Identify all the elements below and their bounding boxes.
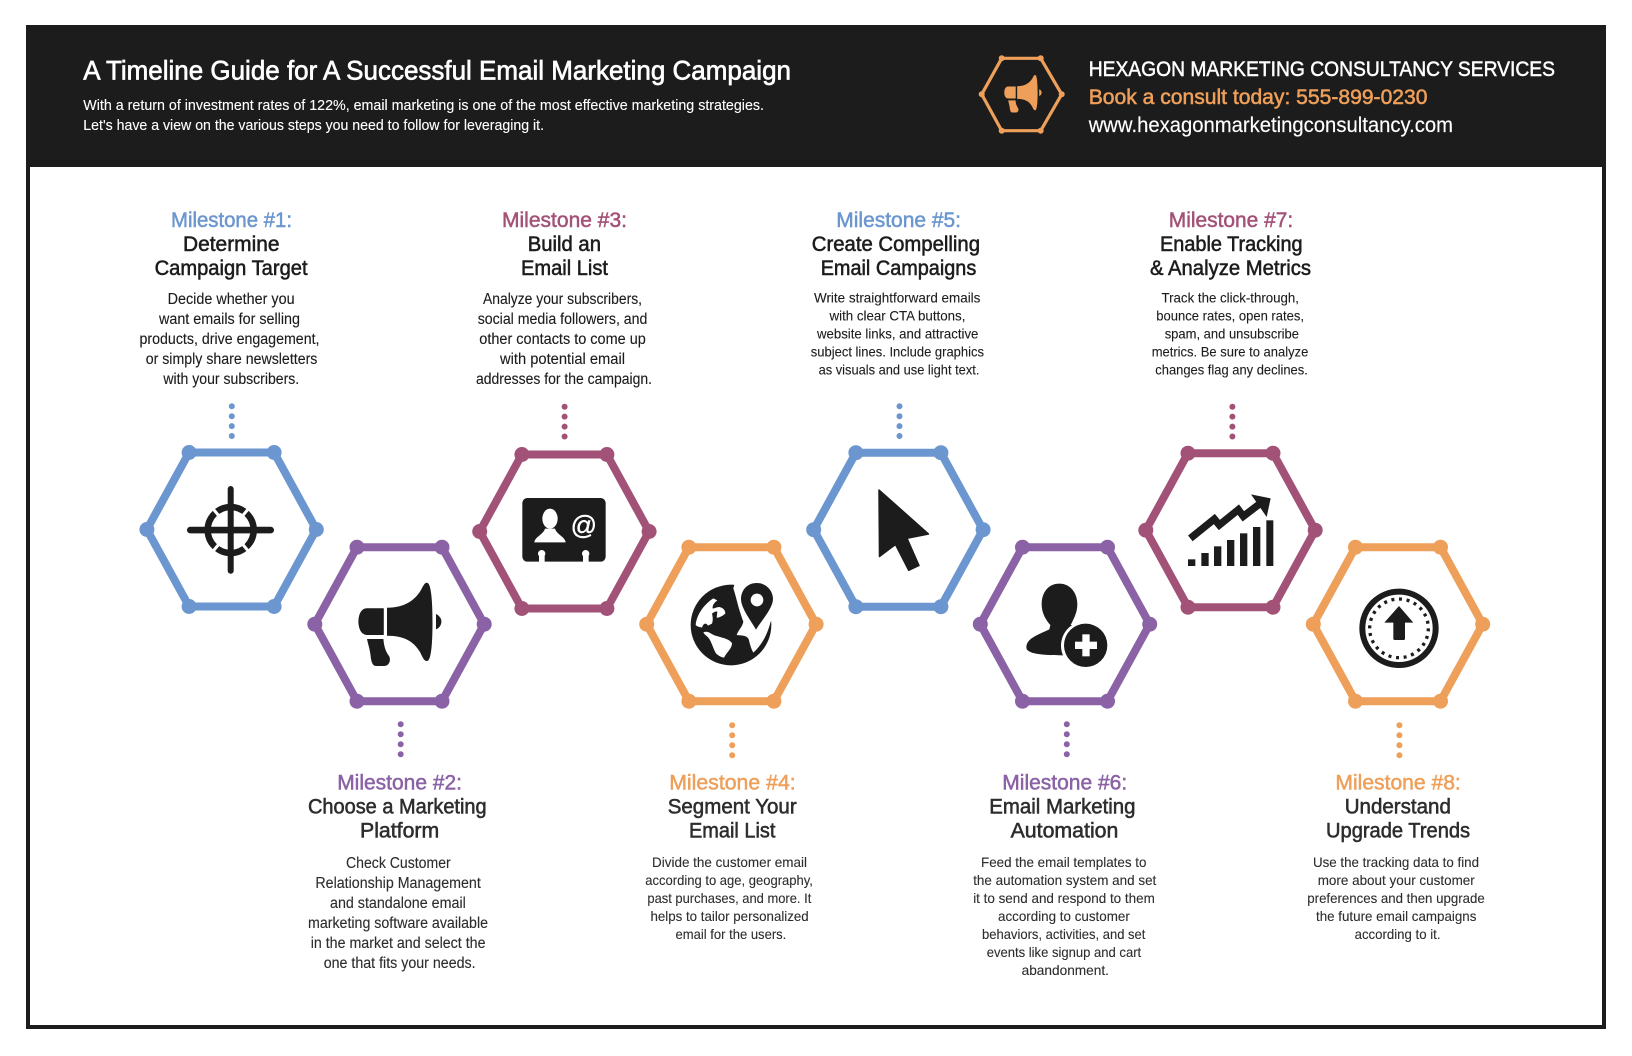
panel: milestone 3 (472, 208, 657, 616)
milestone 3 description: addresses for the campaign. (476, 371, 652, 388)
milestone 2 heading: Platform (360, 819, 439, 843)
title: A Timeline Guide for A Successful Email Marketing Campaign (83, 55, 791, 85)
icon: contact card with at sign: @ (571, 510, 597, 540)
milestone 2 description: marketing software available (308, 915, 488, 932)
subtitle text: With a return of investment rates of 122%, email marketing is one of the most effective marketing strategies. (83, 97, 764, 114)
icon: add user (1026, 584, 1110, 670)
milestone 2 description: one that fits your needs. (324, 955, 476, 972)
panel: milestone 8 (1306, 540, 1490, 942)
panel: milestone 6 (973, 540, 1157, 978)
milestone 1 description (140, 291, 320, 388)
milestone 3 description: with potential email (499, 351, 625, 368)
milestone 2 description: and standalone email (330, 895, 466, 912)
milestone 6 description: according to customer (998, 908, 1130, 924)
company contact block: HEXAGON MARKETING CONSULTANCY SERVICES (1089, 57, 1555, 81)
hexagon 5 (806, 445, 991, 614)
connector dots (896, 403, 902, 439)
milestone 7 description: Track the click-through, (1162, 290, 1299, 306)
milestone 3 heading: Build an (528, 232, 601, 256)
connector dots (1396, 722, 1402, 758)
milestone 7 description: bounce rates, open rates, (1156, 308, 1304, 324)
milestone 4 description: past purchases, and more. It (647, 890, 811, 906)
milestone 1 description: products, drive engagement, (140, 331, 320, 348)
milestone 4 description: email for the users. (676, 926, 786, 942)
milestone 6 heading: Email Marketing (989, 795, 1136, 819)
milestone 8 description: more about your customer (1318, 872, 1475, 888)
milestone 3 heading: Email List (521, 256, 608, 280)
milestone 4 heading: Email List (689, 819, 775, 843)
milestone 7 heading: Enable Tracking (1160, 232, 1303, 256)
panel: milestone 7 (1138, 208, 1323, 615)
hexagon 7 (1138, 446, 1323, 615)
milestone 7 description: changes flag any declines. (1155, 362, 1308, 378)
hexagon 3 (472, 447, 657, 616)
connector dots (1064, 721, 1070, 757)
milestone 5 label: Milestone #5: (836, 208, 961, 232)
panel: milestone 5 (806, 208, 991, 614)
milestone 8 description (1307, 854, 1485, 942)
connector dots (1229, 404, 1235, 440)
milestone 1 description: Decide whether you (168, 291, 295, 308)
hexagon 2 (307, 540, 492, 709)
hexagon 6 (973, 540, 1157, 709)
icon: logo hexagon with megaphone (979, 55, 1065, 134)
milestone 5 description: Write straightforward emails (814, 290, 980, 306)
milestone 7 description: metrics. Be sure to analyze (1152, 344, 1309, 360)
milestone 6 description: events like signup and cart (987, 944, 1141, 960)
milestone 8 heading (1326, 795, 1470, 843)
milestone 3 heading (521, 232, 608, 280)
company contact block: www.hexagonmarketingconsultancy.com (1088, 113, 1453, 137)
milestone 1 heading: Campaign Target (155, 256, 308, 280)
connector dots (229, 403, 235, 439)
milestone 4 heading: Segment Your (668, 795, 797, 819)
milestone 4 description: Divide the customer email (652, 854, 807, 870)
milestone 7 heading: & Analyze Metrics (1150, 256, 1311, 280)
milestone 3 label: Milestone #3: (502, 208, 627, 232)
icon: contact card with at sign (522, 498, 606, 562)
hexagon 4 (639, 540, 824, 709)
milestone 3 description: social media followers, and (478, 311, 647, 328)
connector dots (562, 404, 568, 440)
milestone 7 description: spam, and unsubscribe (1165, 326, 1299, 342)
milestone 2 heading (308, 795, 487, 843)
milestone 5 description: with clear CTA buttons, (829, 308, 965, 324)
milestone 1 heading (155, 232, 308, 280)
icon: megaphone (358, 583, 441, 666)
milestone 2 label: Milestone #2: (337, 771, 462, 795)
icon: cursor arrow (879, 490, 928, 570)
milestone 5 heading: Create Compelling (812, 232, 980, 256)
icon: globe with map pin (691, 580, 777, 665)
milestone 6 description: behaviors, activities, and set (982, 926, 1146, 942)
milestone 6 description: it to send and respond to them (973, 890, 1155, 906)
milestone 1 label: Milestone #1: (171, 208, 292, 232)
milestone 6 heading (989, 795, 1136, 843)
milestone 8 heading: Understand (1345, 795, 1451, 819)
milestone 5 description: website links, and attractive (816, 326, 979, 342)
milestone 2 description: Check Customer (346, 855, 451, 872)
milestone 8 description: the future email campaigns (1316, 908, 1476, 924)
milestone 8 description: Use the tracking data to find (1313, 854, 1479, 870)
connector dots (398, 721, 404, 757)
hexagon 8 (1306, 540, 1490, 709)
milestone 2 heading: Choose a Marketing (308, 795, 487, 819)
milestone 2 description: Relationship Management (315, 875, 481, 892)
panel: milestone 2 (307, 540, 492, 972)
milestone 7 description (1152, 290, 1309, 378)
milestone 1 description: want emails for selling (158, 311, 300, 328)
milestone 3 description: other contacts to come up (479, 331, 646, 348)
milestone 3 description (476, 291, 652, 388)
subtitle text: Let's have a view on the various steps you need to follow for leveraging it. (83, 117, 544, 134)
milestone 3 description: Analyze your subscribers, (483, 291, 642, 308)
milestone 1 heading: Determine (183, 232, 280, 256)
panel: milestone 1 (139, 208, 324, 614)
milestone 6 description: abandonment. (1022, 962, 1109, 978)
subtitle text (83, 97, 764, 134)
milestone 2 description: in the market and select the (311, 935, 486, 952)
milestone 4 description: according to age, geography, (645, 872, 813, 888)
milestone 1 description: or simply share newsletters (146, 351, 318, 368)
milestone 4 label: Milestone #4: (669, 771, 796, 795)
milestone 2 description (308, 855, 488, 972)
milestone 6 description: the automation system and set (973, 872, 1156, 888)
milestone 4 description: helps to tailor personalized (650, 908, 809, 924)
milestone 8 heading: Upgrade Trends (1326, 819, 1470, 843)
milestone 5 heading (812, 232, 980, 280)
milestone 8 description: according to it. (1355, 926, 1440, 942)
milestone 6 description (973, 854, 1156, 978)
connector dots (729, 722, 735, 758)
milestone 1 description: with your subscribers. (162, 371, 299, 388)
hexagon 1 (139, 445, 324, 614)
panel: milestone 4 (639, 540, 824, 942)
icon: rising bar chart with arrow (1188, 494, 1273, 566)
milestone 5 description: as visuals and use light text. (819, 362, 979, 378)
icon: crosshair target (187, 486, 274, 574)
company contact block: Book a consult today: 555-899-0230 (1089, 85, 1428, 109)
milestone 7 label: Milestone #7: (1169, 208, 1293, 232)
milestone 4 heading (668, 795, 797, 843)
milestone 5 description: subject lines. Include graphics (811, 344, 984, 360)
milestone 5 description (811, 290, 984, 378)
milestone 4 description (645, 854, 813, 942)
milestone 8 description: preferences and then upgrade (1307, 890, 1485, 906)
company contact block (1088, 57, 1555, 137)
milestone 6 label: Milestone #6: (1002, 771, 1127, 795)
milestone 6 heading: Automation (1011, 819, 1118, 843)
milestone 5 heading: Email Campaigns (821, 256, 976, 280)
milestone 7 heading (1150, 232, 1311, 280)
icon: upgrade arrow in circle (1362, 592, 1436, 665)
milestone 8 label: Milestone #8: (1335, 771, 1461, 795)
milestone 6 description: Feed the email templates to (981, 854, 1147, 870)
